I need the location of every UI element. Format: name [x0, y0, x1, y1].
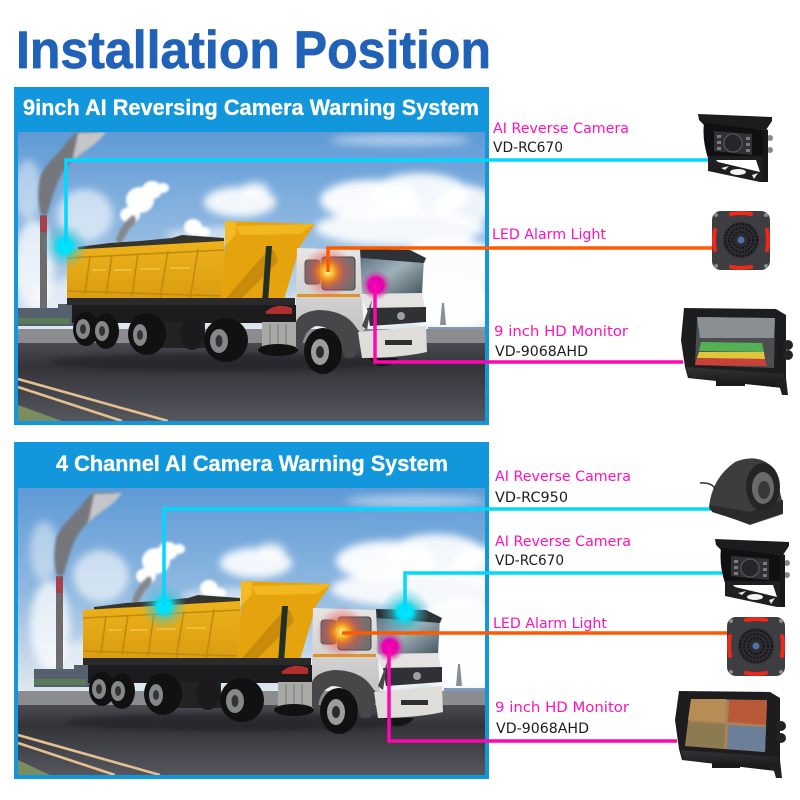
label: LED Alarm Light: LED Alarm Light: [492, 227, 607, 243]
panel heading: 9inch AI Reversing Camera Warning System: [23, 95, 479, 120]
icon: reverse camera RC670: [715, 539, 790, 607]
marker: monitor: [361, 270, 391, 300]
icon: alarm light: [727, 617, 785, 676]
marker: alarm light: [302, 246, 354, 298]
marker: rear camera: [42, 223, 88, 269]
label: AI Reverse Camera VD-RC670: VD-RC670: [493, 140, 563, 156]
leader line: alarm light: [328, 248, 712, 272]
label: AI Reverse Camera VD-RC670: VD-RC670: [495, 553, 564, 569]
leader line: monitor: [389, 647, 677, 741]
truck photo: [14, 132, 500, 421]
leader line: camera RC950: [164, 509, 713, 606]
icon: monitor with parking guide: [681, 308, 793, 395]
panel frame: [14, 87, 489, 425]
label: LED Alarm Light: LED Alarm Light: [493, 616, 608, 632]
label: AI Reverse Camera VD-RC950: VD-RC950: [495, 490, 568, 506]
label: AI Reverse Camera VD-RC670: [495, 534, 631, 569]
label: 9 inch HD Monitor VD-9068AHD: 9 inch HD Monitor: [494, 324, 628, 340]
label: 9 inch HD Monitor VD-9068AHD: [495, 700, 629, 737]
truck photo: [18, 488, 516, 775]
panel heading: 4 Channel AI Camera Warning System: [56, 451, 448, 476]
label: AI Reverse Camera VD-RC670: [493, 121, 629, 156]
panel frame: [14, 442, 489, 779]
marker: second camera: [380, 587, 430, 637]
label: 9 inch HD Monitor VD-9068AHD: [494, 324, 628, 360]
leader line: camera: [66, 160, 708, 246]
marker: monitor: [375, 632, 405, 662]
label: 9 inch HD Monitor VD-9068AHD: VD-9068AHD: [496, 721, 589, 737]
leader line: alarm light: [342, 631, 727, 635]
icon: monitor with four-channel view: [675, 691, 786, 778]
label: 9 inch HD Monitor VD-9068AHD: 9 inch HD Monitor: [495, 700, 629, 716]
label: AI Reverse Camera VD-RC670: AI Reverse Camera: [495, 534, 631, 550]
panel: 4 channel system: [14, 442, 727, 779]
label: AI Reverse Camera VD-RC950: [495, 469, 631, 506]
leader line: monitor: [375, 285, 683, 362]
marker: first camera: [141, 583, 187, 629]
label: AI Reverse Camera VD-RC950: AI Reverse Camera: [495, 469, 631, 485]
title: Installation Position: [16, 21, 491, 80]
label: 9 inch HD Monitor VD-9068AHD: VD-9068AHD: [495, 344, 588, 360]
marker: alarm light: [316, 606, 368, 658]
panel: 9 inch system: [14, 87, 712, 425]
icon: dome camera RC950: [700, 458, 783, 525]
label: AI Reverse Camera VD-RC670: AI Reverse Camera: [493, 121, 629, 137]
leader line: camera RC670: [405, 573, 723, 612]
icon: alarm light: [712, 211, 770, 270]
icon: reverse camera RC670: [698, 114, 773, 182]
